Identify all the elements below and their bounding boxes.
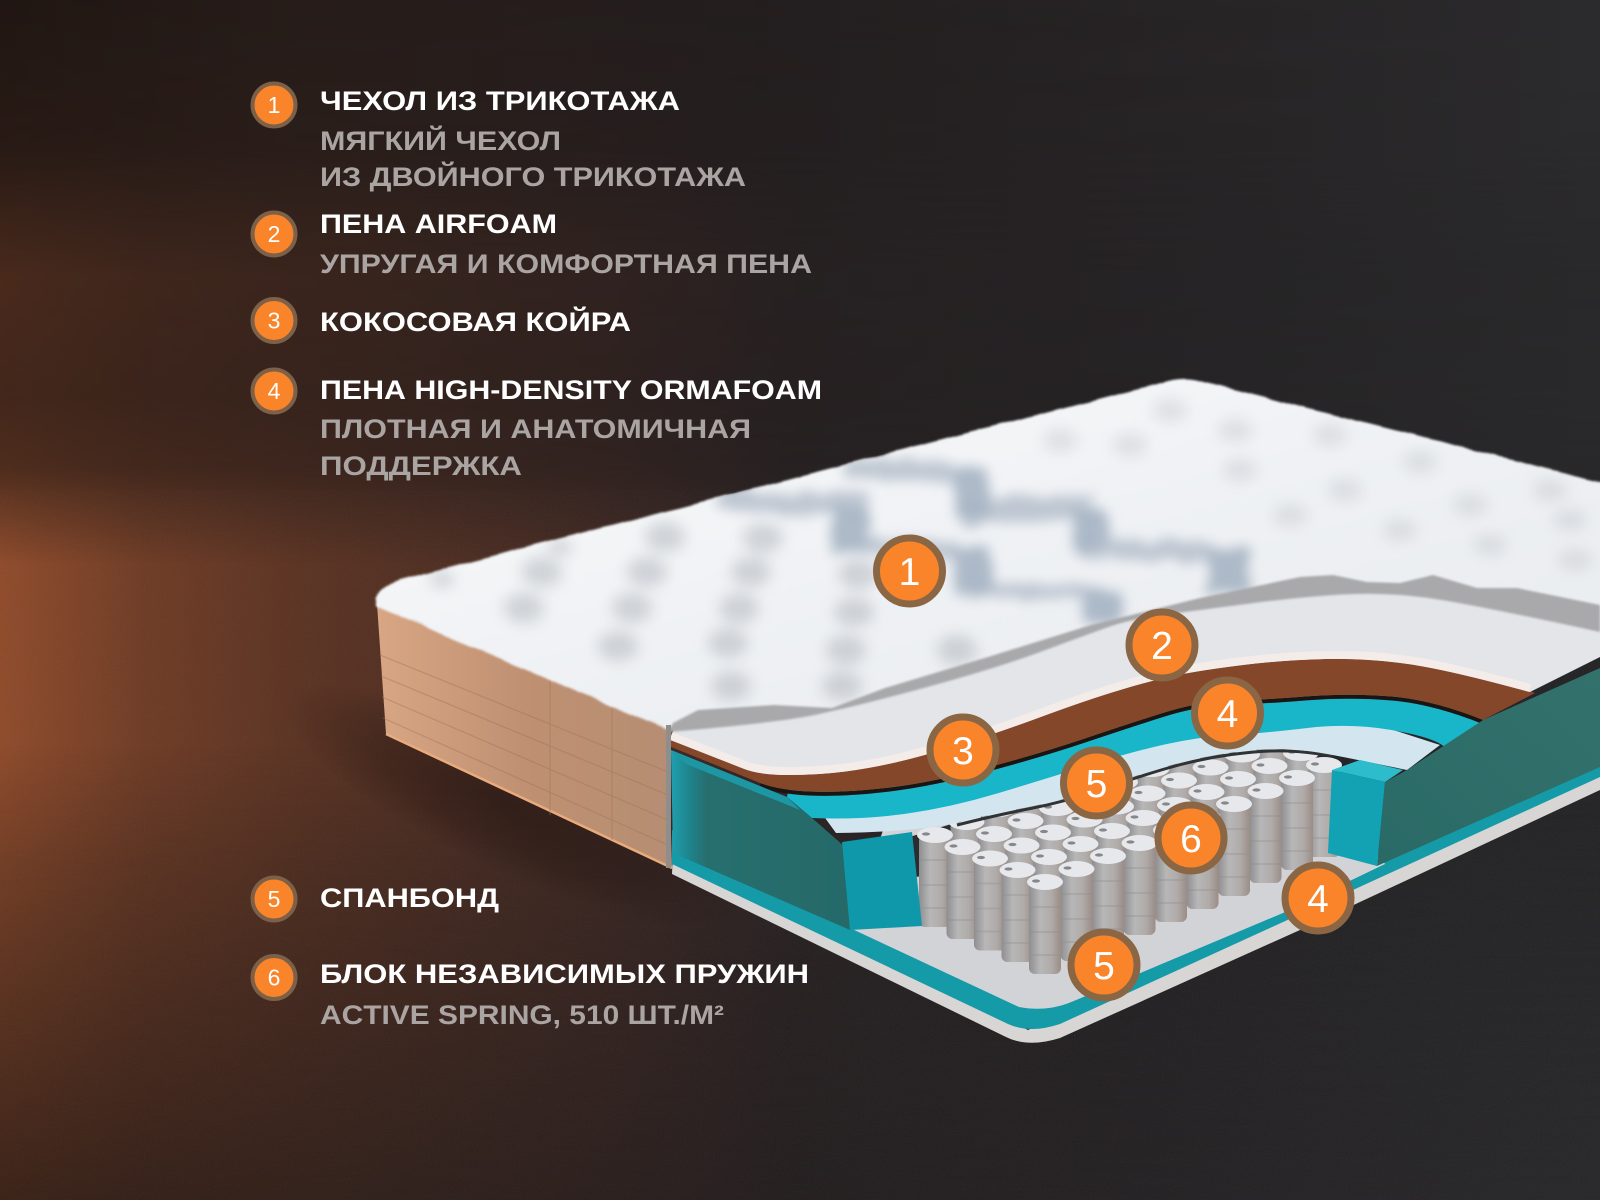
coconut coir layer [671,640,1535,792]
marker 5: upper spunbond [1064,750,1130,816]
marker 5: upper spunbond: 5 [1086,763,1107,806]
marker 3: coir: 3 [952,730,974,773]
legend item 4 [252,370,822,481]
legend item 6: ACTIVE SPRING, 510 ШТ./М² [320,1000,724,1030]
callout markers on mattress [876,538,1351,998]
legend item 4: ПЛОТНАЯ И АНАТОМИЧНАЯ [320,414,751,444]
legend item 1: МЯГКИЙ ЧЕХОЛ [320,126,561,156]
left quilting dimples [430,522,977,701]
legend item 5: 5 [268,886,280,912]
marker 1: cover: 1 [899,551,920,594]
marker 5: lower spunbond [1071,932,1137,998]
legend item 4: ПЕНА HIGH-DENSITY ORMAFOAM [320,375,822,405]
floor shadow [256,640,764,970]
pocket springs [917,734,1342,974]
marker 5: lower spunbond: 5 [1093,945,1115,988]
spunbond layer [812,700,1440,833]
marker 4: lower foam: 4 [1307,878,1329,921]
marker 3: coir [930,717,996,783]
dark cavity behind springs [900,745,1330,880]
marker 6: springs [1158,805,1224,871]
legend item 2: ПЕНА AIRFOAM [320,209,557,239]
legend item 5: СПАНБОНД [320,883,499,913]
legend item 5 [252,878,499,920]
legend item 4: 4 [268,378,281,404]
marker 1: cover [876,538,942,604]
legend item 6 [252,956,809,1030]
teal foam layer [787,680,1490,818]
legend item 3 [252,299,631,342]
marker 4: lower foam [1285,865,1351,931]
legend item 4: ПОДДЕРЖКА [320,451,522,481]
marker 2: airfoam: 2 [1151,625,1173,668]
grey wave band [668,575,1600,732]
right teal wall [1328,668,1600,866]
spring floor [850,780,1385,1009]
legend item 6: БЛОК НЕЗАВИСИМЫХ ПРУЖИН [320,959,809,989]
cut edge strip [666,725,671,868]
mattress illustration [256,379,1600,1043]
marker 2: airfoam [1129,612,1195,678]
coconut coir shadow line [760,697,1483,794]
airfoam white layer [671,575,1600,775]
spunbond shadow edge [957,751,1333,825]
right quilting dimples [1043,399,1592,571]
marker 4: upper foam: 4 [1217,693,1238,736]
marker 4: upper foam [1194,680,1260,746]
legend item 2: УПРУГАЯ И КОМФОРТНАЯ ПЕНА [320,249,812,279]
legend item 6: 6 [268,964,280,990]
legend item 2: 2 [268,221,280,247]
white base under teal [672,775,1600,1043]
legend item 1: ЧЕХОЛ ИЗ ТРИКОТАЖА [320,86,680,116]
legend item 1: 1 [268,92,280,118]
left teal block [671,750,922,930]
legend item 3: КОКОСОВАЯ КОЙРА [320,307,631,337]
teal bottom strip [672,755,1600,1029]
legend item 2 [252,209,812,279]
marker 6: springs: 6 [1180,818,1202,861]
quilted side panel [377,604,672,868]
legend item 3: 3 [268,308,280,334]
legend item 1: ИЗ ДВОЙНОГО ТРИКОТАЖА [320,162,746,192]
quilted top cover [377,379,1600,730]
zigzag grey crease [718,468,1250,626]
legend item 1 [252,84,746,192]
